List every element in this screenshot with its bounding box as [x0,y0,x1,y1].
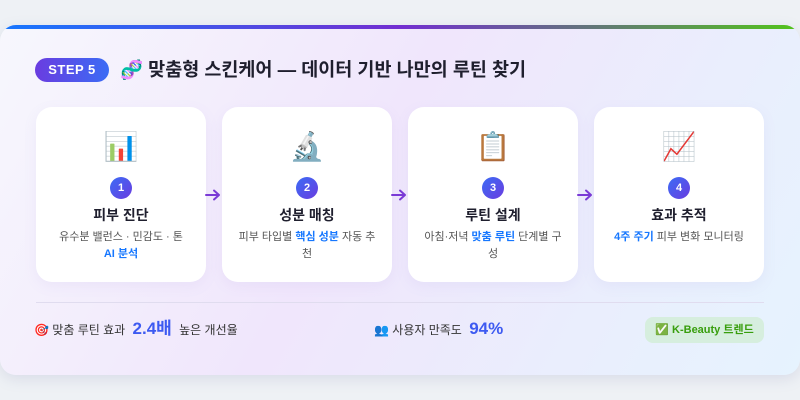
description: 아침·저녁 맞춤 루틴 단계별 구 [424,231,562,243]
number 2: 2 [304,182,310,194]
description: 피부 타입별 핵심 성분 자동 추 [239,231,375,243]
description: 유수분 밸런스 · 민감도 · 톤 [59,231,183,243]
icon: bar chart: 📊 [104,130,138,163]
heading: 피부 진단 [93,207,149,223]
arrow 3 [577,190,592,200]
description: AI 분석 [104,248,138,260]
description [59,230,183,260]
stat: satisfaction: 👥 사용자 만족도 94% [374,319,503,338]
description: 성 [488,248,498,260]
number 1: 1 [118,182,124,194]
card: 피부 진단 [36,107,206,282]
icon: clipboard: 📋 [476,130,510,163]
icon: chart up: 📈 [662,130,696,163]
badge: K-Beauty [645,317,764,343]
stat: improvement: 🎯 맞춤 루틴 효과 2.4배 높은 개선율 [34,319,238,338]
description [424,230,562,260]
number 4: 4 [676,182,682,194]
arrow 1 [205,190,220,200]
number 1 [110,177,132,199]
number 2 [296,177,318,199]
description: 4주 주기 피부 변화 모니터링 [614,231,744,243]
icon: microscope: 🔬 [290,130,324,163]
heading: 루틴 설계 [465,207,521,223]
card: 성분 매칭 [222,107,392,282]
step badge [35,58,109,82]
heading: 성분 매칭 [279,207,335,223]
title: 🧬 맞춤형 스킨케어 — 데이터 기반 나만의 루틴 찾기 [120,59,526,80]
number 3: 3 [490,182,496,194]
card: 효과 추적 [594,107,764,282]
number 3 [482,177,504,199]
step badge: STEP 5 [48,62,96,77]
description: 천 [302,248,312,260]
badge: K-Beauty: ✅ K-Beauty 트렌드 [655,324,754,336]
description [239,230,375,260]
number 4 [668,177,690,199]
card: 루틴 설계 [408,107,578,282]
heading: 효과 추적 [651,207,707,223]
arrow 2 [391,190,406,200]
